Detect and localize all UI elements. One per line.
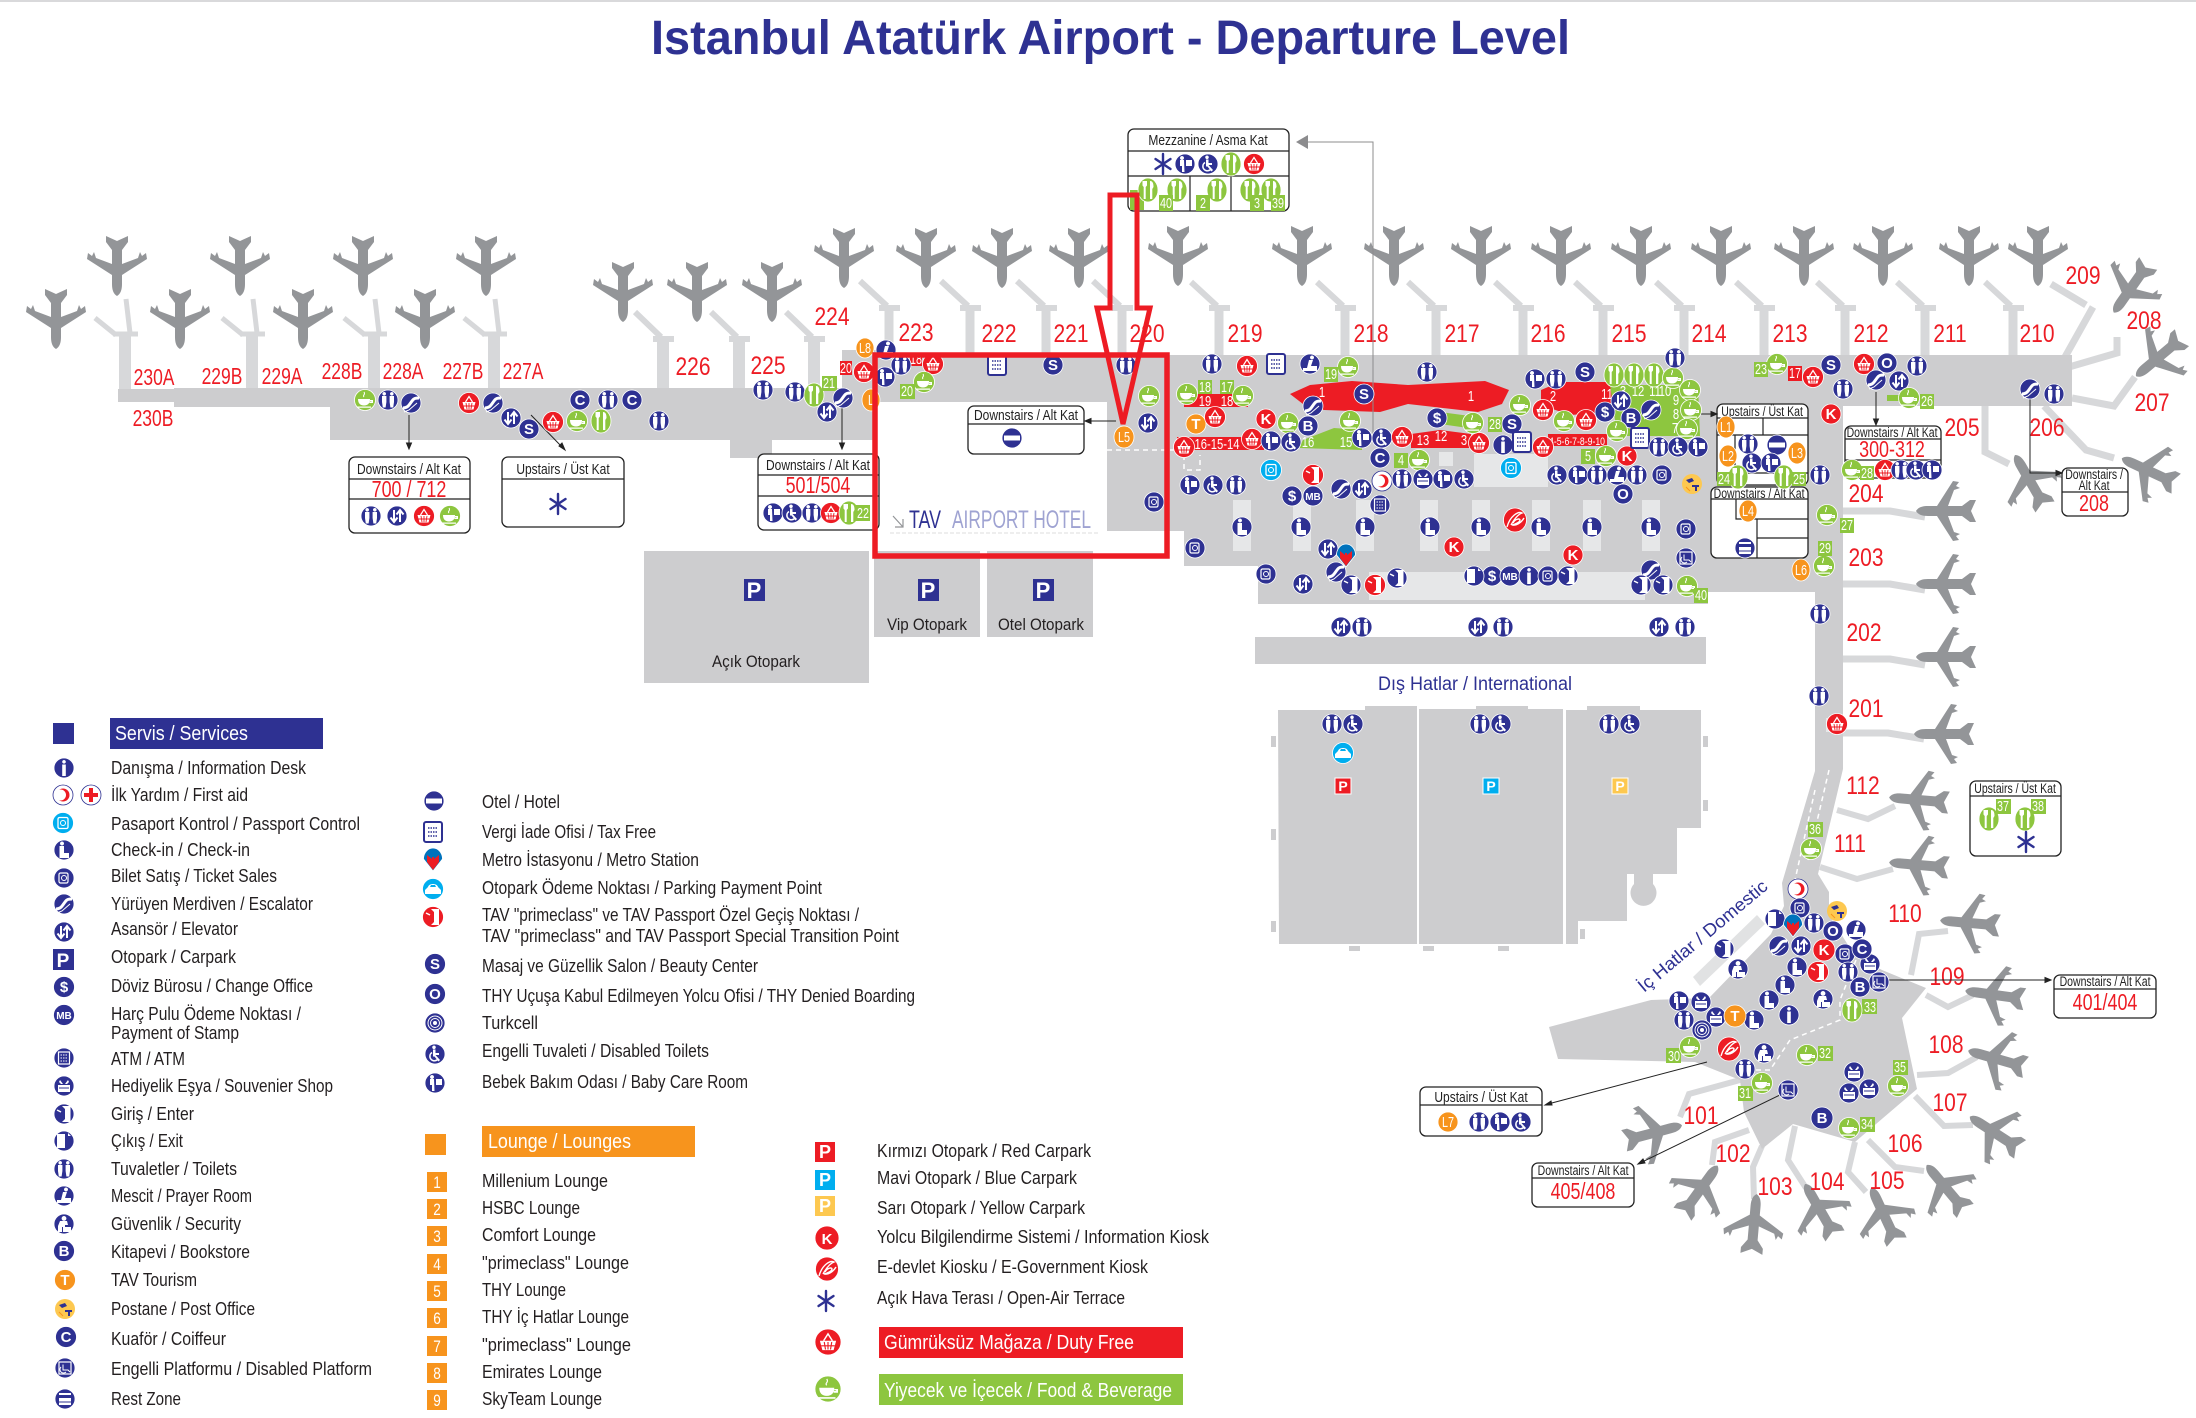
icons: domestic terminal: K xyxy=(1819,942,1830,959)
legend: services column 1: Check-in / Check-in xyxy=(111,839,250,860)
gate numbers: 209 xyxy=(2065,261,2101,289)
legend: lounges: "primeclass" Lounge xyxy=(482,1252,629,1273)
gate numbers: 104 xyxy=(1809,1167,1845,1195)
icons: central hall: 5 xyxy=(1585,447,1591,464)
Duty free and food zones: 2 xyxy=(1550,387,1556,404)
icons: domestic terminal: O xyxy=(1827,923,1839,940)
legend: lounges: 9 xyxy=(433,1392,441,1410)
hotel label: TAV Airport Hotel: TAV xyxy=(909,506,941,534)
callout: 405/408: Downstairs / Alt Kat xyxy=(1538,1163,1629,1178)
legend: services column 2: TAV "primeclass" and TAV Passport Special Transition Point xyxy=(482,925,899,946)
legend: car parks, kiosks and terrace: E-devlet Kiosku / E-Government Kiosk xyxy=(877,1256,1149,1277)
icons: domestic terminal: T xyxy=(1730,1008,1740,1025)
legend bar: food and beverage xyxy=(815,1374,1183,1405)
icons: central hall: 17 xyxy=(1221,378,1233,395)
icons: east concourse: 26 xyxy=(1921,392,1933,409)
legend: car parks, kiosks and terrace: Yolcu Bilgilendirme Sistemi / Information Kiosk xyxy=(877,1226,1210,1247)
icons: lounges in callouts: L6 xyxy=(1795,561,1807,578)
icons: east concourse: 29 xyxy=(1819,539,1831,556)
icons: central hall: B xyxy=(1626,410,1637,427)
gate numbers: 214 xyxy=(1691,319,1727,347)
callout: Mezzanine: Mezzanine / Asma Kat xyxy=(1148,132,1268,148)
legend: lounges: 3 xyxy=(433,1228,441,1246)
callout: 300-312: 28 xyxy=(1861,464,1873,481)
icons: central hall: K xyxy=(1622,448,1633,465)
legend: services column 1: Danışma / Information Desk xyxy=(111,757,307,778)
gate numbers: 102 xyxy=(1715,1139,1751,1167)
gate numbers: 205 xyxy=(1944,413,1980,441)
icons: east concourse: 23 xyxy=(1755,360,1767,377)
gate numbers: 230B xyxy=(133,407,173,432)
icons: west concourse: S xyxy=(524,421,534,438)
Duty free and food zones: 9 xyxy=(1673,391,1679,408)
parking: Vip Otopark: P xyxy=(921,578,935,603)
gate numbers: 207 xyxy=(2134,388,2170,416)
parking: Otel Otopark: P xyxy=(1036,578,1050,603)
callout: 208 xyxy=(2062,467,2128,517)
callout: 401/404: 401/404 xyxy=(2073,990,2137,1016)
gate numbers: 226 xyxy=(675,352,711,380)
icons: lounges in callouts: 25 xyxy=(1793,470,1805,487)
legend: services column 2: Otopark Ödeme Noktası / Parking Payment Point xyxy=(482,877,822,898)
callout: downstairs lounges: Downstairs / Alt Kat xyxy=(1714,486,1805,501)
icons: domestic terminal: B xyxy=(1855,979,1866,996)
legend: services column 2: TAV "primeclass" ve TAV Passport Özel Geçiş Noktası / xyxy=(482,904,860,925)
legend: services column 2: Bebek Bakım Odası / Baby Care Room xyxy=(482,1071,748,1092)
legend: car parks, kiosks and terrace xyxy=(815,1140,1210,1405)
legend: services column 2: Metro İstasyonu / Metro Station xyxy=(482,849,699,870)
icons: central hall: O xyxy=(1617,486,1629,503)
icons: central hall: 4 xyxy=(1398,451,1404,468)
legend: services column 1: P xyxy=(57,951,70,972)
legend: lounges: 5 xyxy=(433,1283,441,1301)
gate numbers: 224 xyxy=(814,302,850,330)
legend: services column 1 xyxy=(52,718,372,1409)
callout: 405/408: 405/408 xyxy=(1551,1179,1615,1205)
parking: Vip Otopark: Vip Otopark xyxy=(887,615,967,634)
parking: Otel Otopark: Otel Otopark xyxy=(998,615,1084,634)
legend: services column 1: TAV Tourism xyxy=(111,1269,197,1290)
legend: services column 1: Payment of Stamp xyxy=(111,1022,239,1043)
icons: west concourse: S xyxy=(1048,357,1058,374)
legend: services column 1: Rest Zone xyxy=(111,1388,181,1409)
legend: lounges: Millenium Lounge xyxy=(482,1170,608,1191)
icons: lounges in callouts: L4 xyxy=(1742,502,1754,519)
gate numbers: 101 xyxy=(1683,1101,1719,1129)
lighter check-in islands xyxy=(1233,362,1834,732)
icons: east concourse: 17 xyxy=(1789,364,1801,381)
red highlight rectangle xyxy=(875,355,1167,556)
icons: central hall: 40 xyxy=(1695,586,1707,603)
icons: domestic terminal: B xyxy=(1817,1110,1828,1127)
legend bar: food and beverage: Yiyecek ve İçecek / Food & Beverage xyxy=(884,1379,1172,1402)
icons: lounges in callouts: L2 xyxy=(1722,447,1734,464)
icons: central hall: $ xyxy=(1433,410,1442,427)
parking: Açık Otopark: Açık Otopark xyxy=(712,652,800,671)
piers: centre and east concourse xyxy=(1191,282,2135,1199)
icons: central hall: 28 xyxy=(1489,415,1501,432)
legend: lounges xyxy=(425,1126,695,1410)
legend: services column 2: Engelli Tuvaleti / Disabled Toilets xyxy=(482,1040,709,1061)
legend: car parks, kiosks and terrace: K xyxy=(822,1231,833,1248)
legend: lounges: THY İç Hatlar Lounge xyxy=(482,1306,629,1327)
gate numbers: 228A xyxy=(383,360,424,385)
gate numbers: 219 xyxy=(1227,319,1263,347)
icons: east concourse: K xyxy=(1826,406,1837,423)
legend: car parks, kiosks and terrace: Kırmızı Otopark / Red Carpark xyxy=(877,1140,1092,1161)
callout: upstairs lounges: Upstairs / Üst Kat xyxy=(1721,404,1803,419)
icons: west concourse: 20 xyxy=(901,382,913,399)
icons: international car parks: P xyxy=(1338,778,1348,794)
callout: 300-312: Downstairs / Alt Kat xyxy=(1847,425,1938,440)
icons: west concourse xyxy=(354,338,1063,439)
legend: services column 1: Otopark / Carpark xyxy=(111,946,237,967)
icons: domestic terminal: 34 xyxy=(1861,1115,1873,1132)
gate numbers: 223 xyxy=(898,318,934,346)
icons: central hall: K xyxy=(1449,539,1460,556)
icons: central hall: K xyxy=(1568,547,1579,564)
legend: lounges: Comfort Lounge xyxy=(482,1224,596,1245)
aeroplanes xyxy=(26,226,2196,1257)
legend header: lounges xyxy=(482,1126,695,1157)
icons: east concourse xyxy=(1754,353,2064,734)
gate numbers: 106 xyxy=(1887,1129,1923,1157)
icons: domestic terminal xyxy=(1666,820,1908,1138)
gate numbers: 203 xyxy=(1848,543,1884,571)
parking: Açık Otopark: P xyxy=(747,578,761,603)
callout: upstairs 37/38: 38 xyxy=(2032,797,2044,814)
legend: services column 2: O xyxy=(429,986,441,1003)
gate numbers: 206 xyxy=(2029,413,2065,441)
icons: west concourse: L8 xyxy=(859,339,871,356)
callout: 300-312: 300-312 xyxy=(1859,437,1925,463)
top edge line xyxy=(0,0,2196,2)
icons: central hall: K xyxy=(1261,411,1272,428)
legend: services column 2: Otel / Hotel xyxy=(482,791,560,812)
legend: services column 1: Kitapevi / Bookstore xyxy=(111,1241,250,1262)
icons: central hall: T xyxy=(1191,416,1201,433)
Duty free and food zones: 19 xyxy=(1199,392,1211,409)
gate numbers: 201 xyxy=(1848,694,1884,722)
icons: central hall: S xyxy=(1507,416,1517,433)
legend: services column 2: S xyxy=(430,956,440,973)
Duty free and food zones: 1 xyxy=(1468,387,1474,404)
callout: 700/712: 700 / 712 xyxy=(372,477,446,503)
icons: lounges in callouts: 24 xyxy=(1718,470,1730,487)
callout: 501/504: Downstairs / Alt Kat xyxy=(766,457,870,473)
dashed lines xyxy=(1107,450,1856,1070)
legend: services column 1: Pasaport Kontrol / Passport Control xyxy=(111,813,360,834)
domestic light strip xyxy=(1693,915,1765,986)
legend: lounges: 4 xyxy=(433,1256,441,1274)
icons: east concourse: 27 xyxy=(1841,516,1853,533)
hotel label: TAV Airport Hotel: AIRPORT HOTEL xyxy=(952,506,1091,534)
legend: car parks, kiosks and terrace: Açık Hava Terası / Open-Air Terrace xyxy=(877,1287,1125,1308)
icons: west concourse: L xyxy=(868,391,874,408)
icons: central hall: L5 xyxy=(1118,428,1130,445)
gate numbers: 222 xyxy=(981,319,1017,347)
legend: lounges: 2 xyxy=(433,1201,441,1219)
Duty free and food zones: 11 xyxy=(1649,382,1661,399)
legend: services column 1: Tuvaletler / Toilets xyxy=(111,1158,237,1179)
icons: central hall: S xyxy=(1359,386,1369,403)
callout: 208: Alt Kat xyxy=(2079,478,2110,493)
icons: international car parks: P xyxy=(1615,778,1625,794)
gate numbers: 110 xyxy=(1888,899,1922,927)
gate numbers: 218 xyxy=(1353,319,1389,347)
gate numbers: 208 xyxy=(2126,306,2162,334)
icons: west concourse: 21 xyxy=(823,374,835,391)
icons: lounges in callouts xyxy=(1717,416,1810,581)
gate numbers: 109 xyxy=(1929,962,1965,990)
Duty free and food zones: 8 xyxy=(1673,405,1679,422)
domestic terminal xyxy=(1549,700,1926,1149)
arrow: mezzanine leader xyxy=(1296,135,1373,440)
callout: hotel downstairs xyxy=(968,406,1084,454)
callout: 700/712: Downstairs / Alt Kat xyxy=(357,461,461,477)
callout: 405/408 xyxy=(1532,1163,1634,1207)
parking: Otel Otopark xyxy=(987,551,1093,637)
icons: international car parks: P xyxy=(1486,778,1496,794)
legend: services column 1: Mescit / Prayer Room xyxy=(111,1185,252,1206)
legend: services column 1: İlk Yardım / First aid xyxy=(111,784,248,805)
legend: services column 1: Döviz Bürosu / Change Office xyxy=(111,975,313,996)
callout: L7 upstairs: L7 xyxy=(1442,1113,1454,1130)
legend: services column 1: C xyxy=(61,1329,72,1346)
region label: Domestic: İç Hatlar / Domestic xyxy=(1634,876,1771,996)
icons: domestic terminal: 32 xyxy=(1819,1044,1831,1061)
Duty free and food zones: 12 xyxy=(1632,382,1644,399)
icons: west concourse: C xyxy=(575,392,586,409)
legend: services column 1: Yürüyen Merdiven / Escalator xyxy=(111,893,313,914)
gate numbers: 227A xyxy=(503,360,544,385)
icons: international car parks xyxy=(1322,714,1640,794)
legend: services column 2: THY Uçuşa Kabul Edilmeyen Yolcu Ofisi / THY Denied Boarding xyxy=(482,985,915,1006)
legend: services column 1: Asansör / Elevator xyxy=(111,918,238,939)
red arrow pointing to L5 xyxy=(1097,195,1150,424)
callout: hotel downstairs: Downstairs / Alt Kat xyxy=(974,407,1078,423)
gate numbers xyxy=(133,261,2170,1200)
legend header: lounges: Lounge / Lounges xyxy=(488,1131,631,1153)
icons: domestic terminal: 36 xyxy=(1809,820,1821,837)
legend: lounges: HSBC Lounge xyxy=(482,1197,580,1218)
callout: 501/504: 501/504 xyxy=(786,473,850,499)
legend header: services xyxy=(110,718,323,749)
parking: Açık Otopark xyxy=(644,551,869,683)
Duty free and food zones xyxy=(1177,381,1901,452)
Duty free and food zones: 11 xyxy=(1601,385,1613,402)
Duty free and food zones: 16-15-14 xyxy=(1194,435,1240,452)
legend: services column 1: Harç Pulu Ödeme Noktası / xyxy=(111,1003,302,1024)
legend: services column 1: Güvenlik / Security xyxy=(111,1213,242,1234)
icons: central hall: $ xyxy=(1601,404,1610,421)
callout: 501/504: 22 xyxy=(857,504,869,521)
icons: central hall: S xyxy=(1580,364,1590,381)
parking: Vip Otopark xyxy=(874,551,980,637)
gate numbers: 230A xyxy=(134,366,175,391)
legend: car parks, kiosks and terrace: Sarı Otopark / Yellow Carpark xyxy=(877,1197,1086,1218)
Duty free and food zones: 4-5-6-7-8-9-10 xyxy=(1549,436,1605,448)
gate numbers: 216 xyxy=(1530,319,1566,347)
Intl strip xyxy=(1255,637,1706,664)
gate numbers: 211 xyxy=(1933,319,1967,347)
callout: Mezzanine: 2 xyxy=(1200,194,1206,211)
callout: upstairs terrace xyxy=(502,457,624,527)
title: Istanbul Atatürk Airport - Departure Level xyxy=(651,12,1570,65)
airport terminal floor plan xyxy=(95,281,2135,1199)
legend: car parks, kiosks and terrace: Mavi Otopark / Blue Carpark xyxy=(877,1167,1078,1188)
callout: 501/504 xyxy=(758,454,879,530)
legend: services column 1: Giriş / Enter xyxy=(111,1103,194,1124)
legend: services column 1: Çıkış / Exit xyxy=(111,1130,183,1151)
gate numbers: 227B xyxy=(443,360,483,385)
legend: services column 2 xyxy=(422,791,915,1093)
legend: lounges: SkyTeam Lounge xyxy=(482,1388,602,1409)
Duty free and food zones: 1 xyxy=(1319,383,1325,400)
icons: domestic terminal: 33 xyxy=(1864,998,1876,1015)
callout: downstairs lounges xyxy=(1711,486,1808,558)
callout: upstairs 37/38 xyxy=(1970,781,2061,856)
Duty free and food zones: 18 xyxy=(1221,392,1233,409)
gate numbers: 107 xyxy=(1932,1088,1968,1116)
Duty free and food zones: 10 xyxy=(1659,382,1671,399)
legend: lounges: THY Lounge xyxy=(482,1279,566,1300)
icons: central hall: MB xyxy=(1305,492,1321,503)
legend: services column 2: Masaj ve Güzellik Salon / Beauty Center xyxy=(482,955,758,976)
legend header: services: Servis / Services xyxy=(115,723,248,745)
callout: Mezzanine: 39 xyxy=(1272,194,1284,211)
gate numbers: 210 xyxy=(2019,319,2055,347)
legend: services column 1: Bilet Satış / Ticket Sales xyxy=(111,865,277,886)
icons: central hall: C xyxy=(1375,450,1386,467)
icons: central hall: 18 xyxy=(1199,378,1211,395)
gate numbers: 215 xyxy=(1611,319,1647,347)
legend bar: duty free: Gümrüksüz Mağaza / Duty Free xyxy=(884,1332,1134,1354)
callout: Mezzanine xyxy=(1128,129,1289,211)
piers: west concourse xyxy=(95,281,1133,390)
callout: L7 upstairs xyxy=(1420,1087,1542,1136)
gate numbers: 217 xyxy=(1444,319,1480,347)
Duty free and food zones: 13 xyxy=(1417,431,1429,448)
Duty free and food zones: 16 xyxy=(1302,433,1314,450)
gate numbers: 220 xyxy=(1129,319,1165,347)
legend bar: duty free xyxy=(815,1327,1183,1358)
icons: central hall: B xyxy=(1303,418,1314,435)
legend: car parks, kiosks and terrace: P xyxy=(819,1142,831,1162)
callout: upstairs 37/38: Upstairs / Üst Kat xyxy=(1974,781,2056,796)
international carpark blocks xyxy=(1271,706,1708,951)
callout: 401/404 xyxy=(2054,974,2156,1018)
region label: International: Dış Hatlar / International xyxy=(1378,674,1572,695)
callout: 700/712 xyxy=(349,457,470,533)
icons: lounges in callouts: L3 xyxy=(1791,444,1803,461)
icons: domestic terminal: 30 xyxy=(1668,1047,1680,1064)
gate numbers: 225 xyxy=(750,351,786,379)
icons: domestic terminal: 31 xyxy=(1739,1084,1751,1101)
icons: domestic terminal: 35 xyxy=(1894,1058,1906,1075)
callout: L7 upstairs: Upstairs / Üst Kat xyxy=(1434,1089,1528,1105)
icons: east concourse: S xyxy=(1826,357,1836,374)
icons: west concourse: 18 xyxy=(910,350,922,367)
legend: lounges: 1 xyxy=(433,1174,441,1192)
legend: services column 1: B xyxy=(59,1243,70,1260)
icons: west concourse: 20 xyxy=(840,359,852,376)
terminal body xyxy=(118,350,2072,769)
legend: services column 1: MB xyxy=(56,1011,72,1022)
legend: lounges: "primeclass" Lounge xyxy=(482,1334,631,1355)
leader arrows xyxy=(406,392,2062,1164)
callout: upstairs lounges xyxy=(1717,404,1808,485)
Duty free and food zones: 7 xyxy=(1672,419,1678,436)
legend: services column 2: Turkcell xyxy=(482,1012,538,1033)
hotel label: TAV Airport Hotel xyxy=(890,506,1100,534)
icons: central hall: 19 xyxy=(1325,365,1337,382)
legend: services column 1: Hediyelik Eşya / Souvenier Shop xyxy=(111,1075,333,1096)
gate numbers: 103 xyxy=(1757,1172,1793,1200)
legend: services column 1: Engelli Platformu / Disabled Platform xyxy=(111,1358,372,1379)
Duty free and food zones: 12 xyxy=(1435,427,1447,444)
icons: lounges in callouts: L1 xyxy=(1720,418,1732,435)
icons: west concourse: C xyxy=(627,392,638,409)
icons: east concourse: O xyxy=(1881,355,1893,372)
icons: central hall xyxy=(1114,348,1708,637)
Duty free and food zones: 15 xyxy=(1340,433,1352,450)
gate numbers: 111 xyxy=(1834,829,1866,857)
callout: 208: 208 xyxy=(2079,491,2109,517)
callout: upstairs 37/38: 37 xyxy=(1997,797,2009,814)
gate numbers: 229B xyxy=(202,365,242,390)
callout: Mezzanine: 40 xyxy=(1160,194,1172,211)
callout: 401/404: Downstairs / Alt Kat xyxy=(2060,974,2151,989)
callout: upstairs terrace: Upstairs / Üst Kat xyxy=(516,461,610,477)
callout: 300-312 xyxy=(1842,425,1942,481)
callout: Mezzanine: 3 xyxy=(1254,194,1260,211)
Duty free and food zones: 3 xyxy=(1620,382,1626,399)
gate numbers: 221 xyxy=(1053,319,1089,347)
legend: services column 1: T xyxy=(60,1272,70,1289)
legend: services column 1: Postane / Post Office xyxy=(111,1298,255,1319)
gate numbers: 112 xyxy=(1846,771,1880,799)
icons: central hall: $ xyxy=(1488,568,1497,585)
icons: domestic terminal: C xyxy=(1857,941,1868,958)
callout: 208: Downstairs / xyxy=(2065,467,2123,482)
gate numbers: 105 xyxy=(1869,1166,1905,1194)
legend: lounges: 7 xyxy=(433,1338,441,1356)
Duty free and food zones: 3 xyxy=(1461,431,1467,448)
icons: central hall: MB xyxy=(1502,572,1518,583)
gate numbers: 213 xyxy=(1772,319,1808,347)
legend: services column 1: ATM / ATM xyxy=(111,1048,185,1069)
icons: central hall: $ xyxy=(1288,488,1297,505)
legend: services column 1: Kuaför / Coiffeur xyxy=(111,1328,226,1349)
legend: services column 1: $ xyxy=(60,979,69,996)
legend: lounges: Emirates Lounge xyxy=(482,1361,602,1382)
gate numbers: 229A xyxy=(262,365,303,390)
gate numbers: 204 xyxy=(1848,479,1884,507)
gate numbers: 108 xyxy=(1928,1030,1964,1058)
gate numbers: 228B xyxy=(322,360,362,385)
legend: car parks, kiosks and terrace: P xyxy=(819,1196,831,1216)
legend: car parks, kiosks and terrace: P xyxy=(819,1170,831,1190)
legend: lounges: 6 xyxy=(433,1310,441,1328)
gate numbers: 202 xyxy=(1846,618,1882,646)
legend: services column 2: Vergi İade Ofisi / Tax Free xyxy=(482,821,656,842)
legend: lounges: 8 xyxy=(433,1365,441,1383)
gate numbers: 212 xyxy=(1853,319,1889,347)
